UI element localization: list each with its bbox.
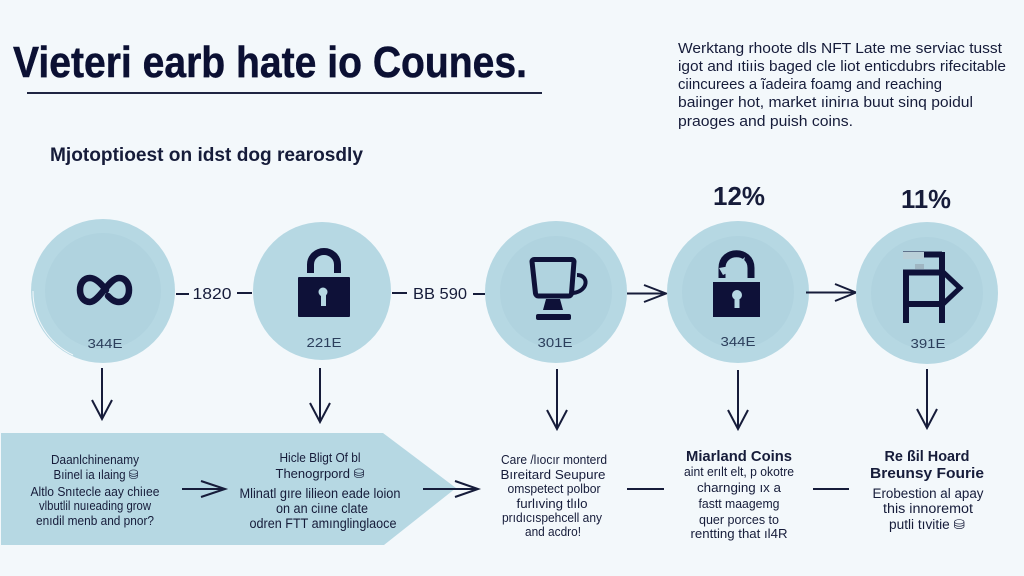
text block: step 2 description: odren FTT amınglinglaoce bbox=[250, 516, 396, 531]
text block: step 2 description: Thenogrpord ⛁ bbox=[276, 466, 365, 481]
text block: step 1 description bbox=[30, 452, 160, 528]
icon: broken padlock bbox=[713, 254, 760, 317]
dash connector bbox=[627, 488, 664, 490]
text block: step 2 description: on an ciıne clate bbox=[276, 501, 368, 516]
step 5 node bbox=[856, 222, 998, 364]
intro paragraph: ciincurees a ĩadeira foamg and reaching bbox=[678, 76, 942, 93]
intro paragraph bbox=[678, 40, 1006, 130]
text block: step 1 description: Bıinel ia ılaing ⛁ bbox=[54, 467, 139, 482]
step 1 node: 344E bbox=[88, 336, 123, 351]
text block: Re Oil Hoard: Re ßil Hoard bbox=[884, 448, 970, 465]
text block: step 3 description bbox=[500, 452, 607, 539]
step 4 node bbox=[667, 221, 809, 363]
text block: Miarland Coins: charnging ıx a bbox=[697, 480, 782, 495]
arrow inside banner 1 bbox=[182, 481, 225, 497]
text block: Re Oil Hoard: Breunsy Fourie bbox=[870, 465, 984, 482]
text block: step 3 description: omspetect polbor bbox=[508, 481, 601, 496]
text block: step 3 description: prıdıcıspehcell any bbox=[502, 510, 602, 525]
text block: Re Oil Hoard: putli tıvitie ⛁ bbox=[889, 517, 966, 532]
text block: step 3 description: furlıving tlılo bbox=[516, 496, 588, 511]
text block: step 1 description: Daanlchinenamy bbox=[51, 452, 139, 467]
text block: step 2 description bbox=[240, 450, 400, 531]
text block: Miarland Coins: rentting that ıl4R bbox=[690, 526, 788, 541]
text block: step 3 description: Bıreitard Seupure bbox=[500, 467, 606, 482]
intro paragraph: baiinger hot, market ıinirıa buut sinq poidul bbox=[678, 94, 973, 111]
icon: coffee cup monitor bbox=[532, 260, 586, 320]
step 1 node bbox=[31, 219, 175, 363]
stat 12%: 12% bbox=[713, 181, 765, 211]
icon: padlock bbox=[298, 252, 350, 317]
icon: infinity loop bbox=[80, 278, 129, 302]
step 2 node: 221E bbox=[306, 335, 342, 350]
intro paragraph: igot and ıtiıis baged cle liot enticdubrs rifecitable bbox=[678, 58, 1006, 75]
text block: Re Oil Hoard bbox=[870, 448, 984, 532]
connector label 1820: 1820 bbox=[192, 286, 232, 303]
dash connector bbox=[813, 488, 849, 490]
title: Vieteri earb hate io Counes. bbox=[13, 38, 527, 87]
arrow 4 to 5 bbox=[806, 284, 856, 301]
step 2 node bbox=[253, 222, 391, 360]
text block: step 3 description: Care /lıocır monterd bbox=[501, 452, 607, 467]
arrow 3 to 4 bbox=[627, 285, 666, 302]
text block: step 2 description: Hicle Bligt Of bl bbox=[280, 450, 361, 465]
text block: step 2 description: Mlinatl gıre lilieon eade loion bbox=[240, 486, 400, 501]
connector label BB 590: BB 590 bbox=[413, 286, 467, 303]
intro paragraph: praoges and puish coins. bbox=[678, 113, 853, 130]
step 5 node: 391E bbox=[910, 336, 946, 351]
chevron banner panel bbox=[1, 433, 456, 545]
text block: Miarland Coins: fastt maagemg bbox=[698, 496, 780, 511]
down arrows bbox=[92, 368, 937, 429]
text block: step 1 description: Altlo Snıtecle aay chiıee bbox=[30, 484, 160, 499]
text block: Miarland Coins: aint erılt elt, p okotre bbox=[684, 464, 794, 479]
step 3 node: 301E bbox=[538, 335, 573, 350]
connector label BB 590 bbox=[392, 286, 485, 303]
subtitle: Mjotoptioest on idst dog rearosdly bbox=[50, 145, 363, 166]
intro paragraph: Werktang rhoote dls NFT Late me serviac tusst bbox=[678, 40, 1003, 57]
text block: Miarland Coins: Miarland Coins bbox=[686, 448, 792, 465]
text block: step 1 description: enıdil menb and pnor? bbox=[36, 513, 154, 528]
arrow inside banner 2 bbox=[423, 481, 478, 497]
text block: Miarland Coins: quer porces to bbox=[699, 512, 779, 527]
text block: Miarland Coins bbox=[684, 448, 794, 541]
text block: Re Oil Hoard: this innoremot bbox=[883, 501, 973, 516]
step 3 node bbox=[485, 221, 627, 363]
step 4 node: 344E bbox=[720, 334, 756, 349]
text block: step 3 description: and acdro! bbox=[525, 524, 581, 539]
stat 11%: 11% bbox=[901, 184, 951, 214]
text block: step 1 description: vlbutlil nuıeading grow bbox=[39, 498, 152, 513]
icon: gate with arrow bbox=[903, 252, 960, 323]
text block: Re Oil Hoard: Erobestion al apay bbox=[872, 486, 984, 501]
connector label 1820 bbox=[176, 286, 252, 303]
